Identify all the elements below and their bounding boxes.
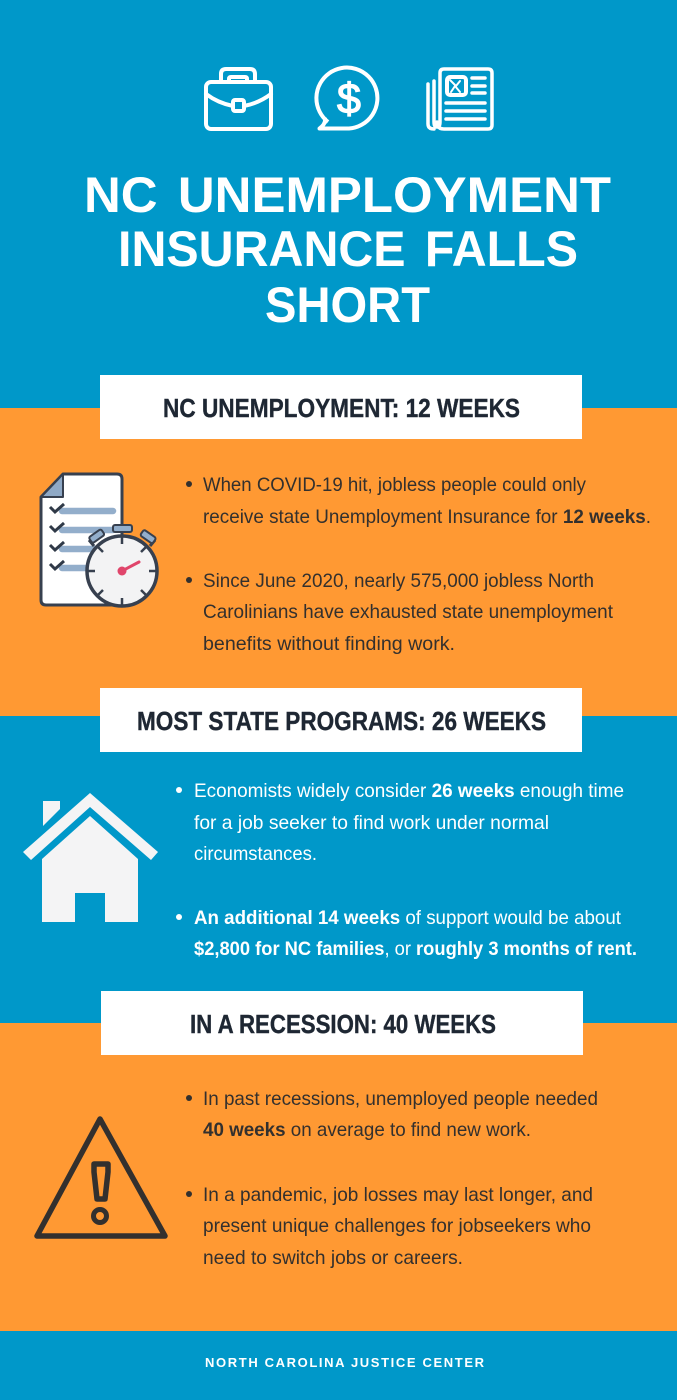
text block: NC unemployment bullets xyxy=(186,474,651,655)
text block: NC unemployment bullets: When COVID-19 hit, jobless people could only xyxy=(203,474,586,496)
text block: NC unemployment bullets: benefits without finding work. xyxy=(203,633,455,655)
icon: newspaper xyxy=(428,69,492,129)
text block: NC unemployment bullets: Carolinians have exhausted state unemployment xyxy=(203,601,614,623)
panel: header background xyxy=(0,0,677,408)
text block: recession bullets xyxy=(186,1088,598,1269)
panel: footer band xyxy=(0,1331,677,1400)
text block: most state programs bullets: circumstances. xyxy=(194,843,317,865)
heading: in a recession 40 weeks xyxy=(101,991,583,1055)
text block: most state programs bullets: $2,800 for NC families, or roughly 3 months of rent. xyxy=(194,938,637,960)
icon: dollar speech bubble: $ xyxy=(337,75,361,123)
icon: dollar speech bubble xyxy=(316,68,377,128)
heading: most state programs 26 weeks xyxy=(100,688,582,752)
text block: most state programs bullets xyxy=(176,780,637,960)
heading: NC unemployment 12 weeks: NC UNEMPLOYMENT: 12 WEEKS xyxy=(163,393,520,423)
heading: NC unemployment 12 weeks xyxy=(100,375,582,439)
text block: NC unemployment bullets: receive state Unemployment Insurance for 12 weeks. xyxy=(203,506,651,528)
text block: recession bullets: 40 weeks on average to find new work. xyxy=(203,1119,531,1141)
icon: checklist with stopwatch xyxy=(41,474,157,606)
icon: house xyxy=(23,793,158,922)
panel: recession band xyxy=(0,1023,677,1331)
text block: recession bullets: In past recessions, unemployed people needed xyxy=(203,1088,598,1110)
text block: most state programs bullets: An additional 14 weeks of support would be about xyxy=(194,907,622,929)
text block: recession bullets: In a pandemic, job losses may last longer, and xyxy=(203,1184,593,1206)
text block: most state programs bullets: Economists widely consider 26 weeks enough time xyxy=(194,780,624,802)
footer: organization name: NORTH CAROLINA JUSTICE CENTER xyxy=(205,1355,485,1370)
title xyxy=(84,167,611,333)
text block: most state programs bullets: for a job seeker to find work under normal xyxy=(194,812,549,834)
panel: most state programs band xyxy=(0,716,677,1023)
title: SHORT xyxy=(265,277,430,333)
panel: NC unemployment band xyxy=(0,408,677,716)
text block: recession bullets: need to switch jobs or careers. xyxy=(203,1247,463,1269)
title: INSURANCE FALLS xyxy=(118,221,578,277)
title: NC UNEMPLOYMENT xyxy=(84,167,611,223)
icon: briefcase xyxy=(206,69,271,129)
icon: warning triangle xyxy=(37,1119,165,1236)
text block: recession bullets: present unique challenges for jobseekers who xyxy=(203,1215,591,1237)
heading: in a recession 40 weeks: IN A RECESSION: 40 WEEKS xyxy=(190,1009,496,1039)
heading: most state programs 26 weeks: MOST STATE PROGRAMS: 26 WEEKS xyxy=(137,706,546,736)
text block: NC unemployment bullets: Since June 2020, nearly 575,000 jobless North xyxy=(203,570,594,592)
